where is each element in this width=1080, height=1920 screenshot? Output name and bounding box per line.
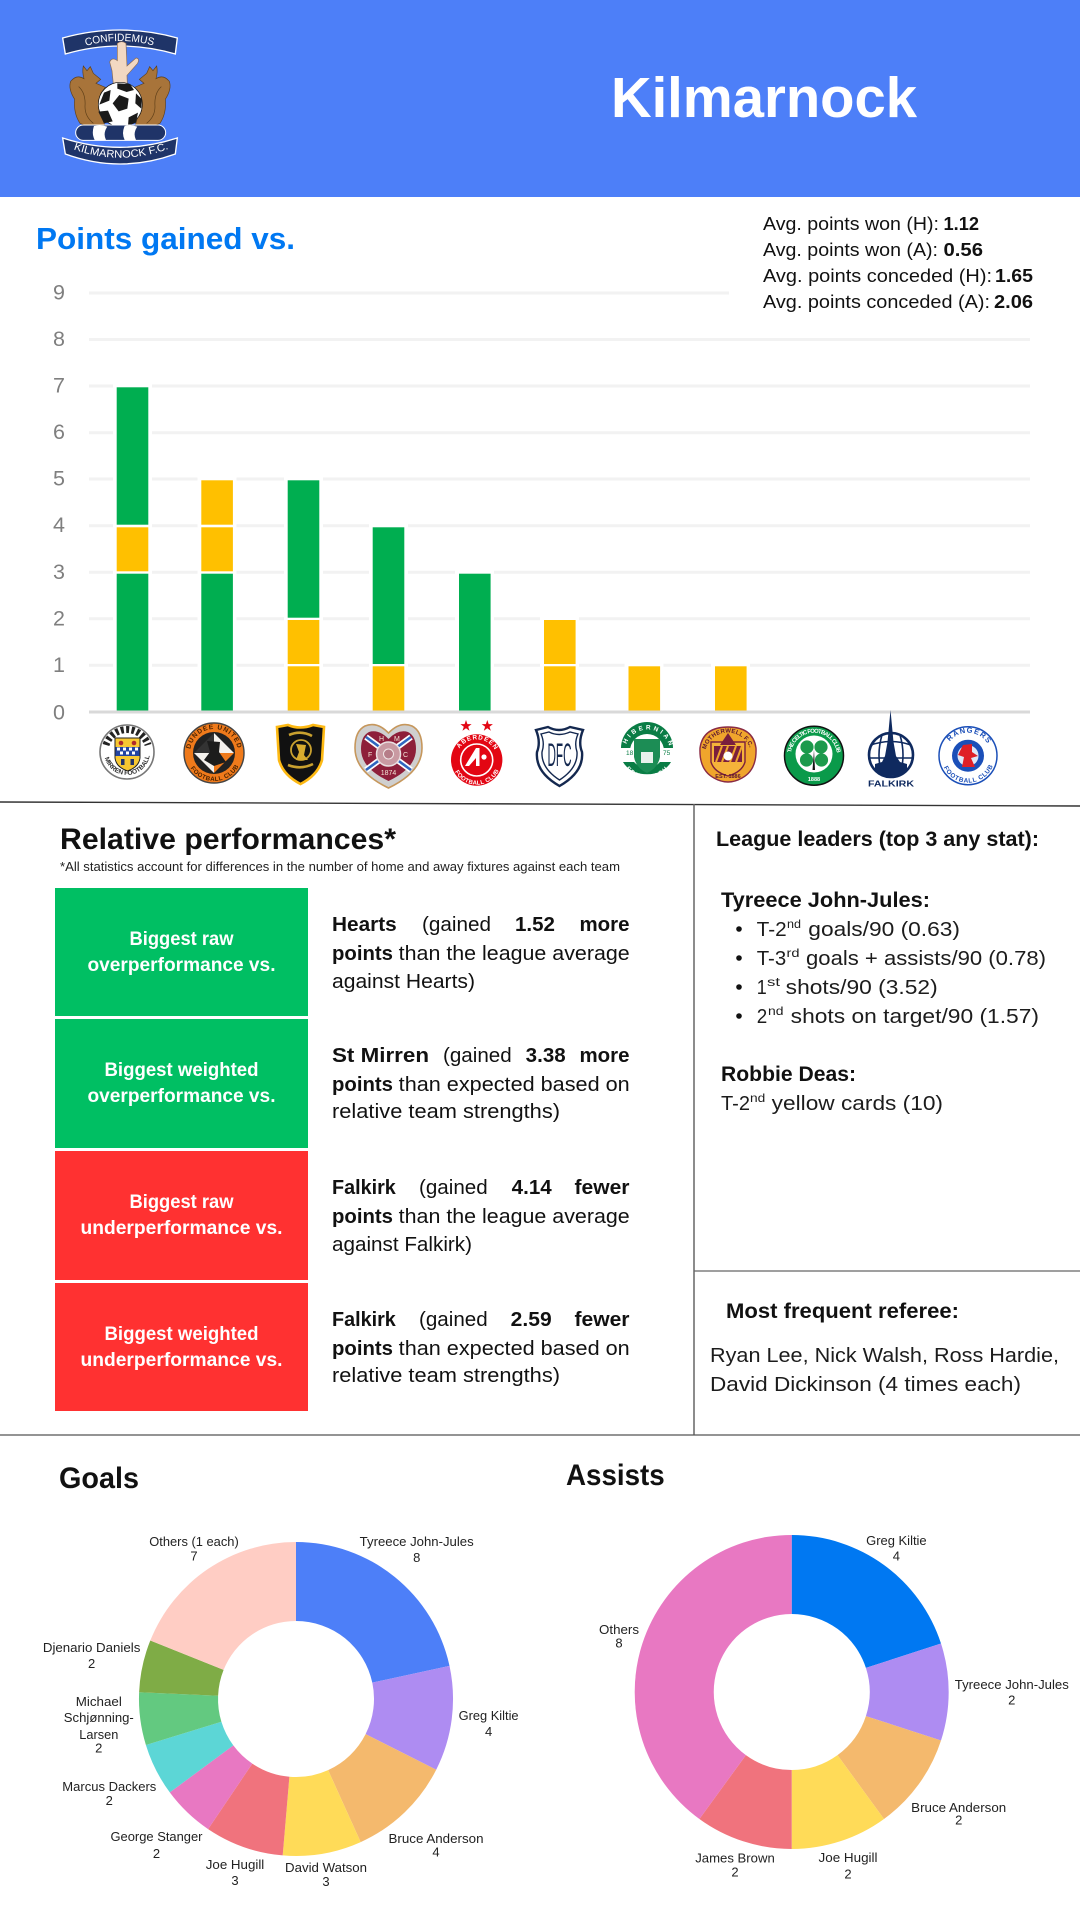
goal labels: 8: [413, 1550, 420, 1565]
goal labels: 4: [432, 1844, 440, 1860]
assist labels: 4: [893, 1548, 900, 1564]
row: raw underperformance: points: [332, 1206, 393, 1228]
goal labels: 2: [106, 1793, 113, 1808]
row: weighted underperformance: Biggest weighted: [104, 1324, 258, 1345]
row: raw overperformance: than the league average: [399, 943, 630, 965]
panel: most frequent referee: Most frequent referee:: [726, 1300, 959, 1323]
stats: average points: 2.06: [994, 291, 1033, 312]
row: weighted underperformance: [55, 1283, 630, 1411]
assist labels: Greg Kiltie: [866, 1533, 927, 1548]
icon: Rangers: [938, 726, 998, 786]
row: raw underperformance: 4.14: [512, 1177, 553, 1199]
player: Robbie Deas: Robbie Deas:: [721, 1063, 856, 1086]
goal labels: Michael: [76, 1694, 122, 1709]
panel: relative performances: [55, 823, 630, 1411]
goal labels: 2: [153, 1846, 160, 1861]
icon: Hibernian: 18: [626, 750, 634, 757]
assist labels: Joe Hugill: [818, 1850, 878, 1865]
row: weighted overperformance: (gained: [443, 1045, 512, 1067]
stats: average points: 0.56: [944, 239, 983, 260]
goal labels: Marcus Dackers: [62, 1779, 157, 1794]
player: Robbie Deas: T-2: [721, 1092, 750, 1115]
assist labels: 2: [955, 1812, 962, 1828]
row: raw underperformance: fewer: [574, 1177, 630, 1199]
icon: Rangers: RANGERS: [946, 728, 991, 743]
stats: average points: Avg. points conceded (H):: [763, 265, 992, 286]
row: weighted overperformance: points: [332, 1074, 393, 1096]
row: raw underperformance: than the league average: [399, 1206, 630, 1228]
icon: Aberdeen: [451, 720, 502, 786]
row: weighted overperformance: [55, 1019, 630, 1148]
panel: league leaders: [716, 828, 1046, 1115]
player: Tyreece John-Jules: st: [767, 975, 781, 989]
donut chart: assists: [599, 1533, 1069, 1882]
row: raw underperformance: against Falkirk): [332, 1234, 472, 1256]
icon: Hibernian: 75: [663, 750, 671, 757]
icon: Motherwell: MOTHERWELL F.C.: [702, 728, 752, 750]
icon: Hibernian: [621, 722, 673, 774]
goal labels: David Watson: [285, 1860, 367, 1875]
icon: Hearts: F: [368, 752, 372, 759]
goal labels: Others (1 each): [149, 1534, 239, 1549]
row: weighted underperformance: fewer: [574, 1309, 630, 1331]
goal labels: Joe Hugill: [206, 1857, 264, 1872]
icon: Livingston: [277, 725, 324, 784]
title: Kilmarnock: [611, 66, 917, 130]
heading: League leaders (top 3 any stat):: [716, 828, 1039, 851]
row: raw overperformance: overperformance vs.: [88, 955, 276, 976]
icon: Celtic: 1888: [808, 777, 820, 783]
row: weighted underperformance: underperformance vs.: [80, 1350, 282, 1371]
goal labels: 2: [95, 1740, 102, 1756]
icon: Hearts: 1874: [381, 770, 396, 777]
player: Robbie Deas: [721, 1063, 943, 1115]
row: raw overperformance: Hearts: [332, 914, 397, 936]
icon: Falkirk: FALKIRK: [868, 778, 915, 788]
goal labels: 3: [231, 1873, 239, 1888]
goal labels: 2: [88, 1656, 95, 1671]
icon: Dundee: DFC: [548, 737, 572, 773]
player: Tyreece John-Jules: [721, 889, 1046, 1028]
panel: most frequent referee: David Dickinson (4 times each): [710, 1373, 1021, 1396]
player: Tyreece John-Jules: T-3: [757, 947, 786, 970]
icon: Dundee United: FOOTBALL CLUB: [190, 764, 238, 781]
icon: Celtic: [784, 726, 844, 786]
heading: points gained: Points gained vs.: [36, 221, 295, 256]
player: Robbie Deas: nd: [750, 1091, 765, 1105]
stats: average points: 1.65: [995, 265, 1033, 286]
goal labels: Schjønning-: [64, 1710, 134, 1725]
row: weighted underperformance: 2.59: [511, 1309, 552, 1331]
row: weighted underperformance: (gained: [419, 1309, 488, 1331]
y axis labels: 0: [53, 700, 65, 724]
icon: Celtic: THE CELTIC FOOTBALL CLUB: [787, 728, 841, 752]
player: Tyreece John-Jules: 2: [757, 1005, 767, 1028]
icon: Hearts: M: [394, 736, 400, 743]
icon: Aberdeen: FOOTBALL CLUB: [455, 770, 498, 785]
goal labels: Tyreece John-Jules: [360, 1534, 474, 1549]
icon: Hibernian: HIBERNIAN: [622, 725, 673, 746]
icon: Hearts: H: [379, 736, 384, 743]
icon row: opponent club crests: [99, 710, 998, 789]
player: Tyreece John-Jules: 1: [757, 976, 767, 999]
y axis labels: 5: [53, 466, 65, 490]
row: raw underperformance: Biggest raw: [130, 1192, 234, 1213]
icon: Kilmarnock crest: [62, 29, 178, 165]
row: raw underperformance: underperformance vs.: [80, 1218, 282, 1239]
row: weighted underperformance: points: [332, 1338, 393, 1360]
donut chart: goals: [43, 1534, 519, 1889]
goal labels: [43, 1534, 519, 1889]
row: raw overperformance: 1.52: [515, 914, 555, 936]
player: Tyreece John-Jules: goals/90 (0.63): [808, 918, 960, 941]
icon: St Mirren: [99, 724, 155, 780]
panel: most frequent referee: Ryan Lee, Nick Walsh, Ross Hardie,: [710, 1344, 1059, 1367]
goal labels: 7: [190, 1548, 198, 1564]
row: raw underperformance: (gained: [419, 1177, 488, 1199]
y axis labels: [53, 280, 65, 724]
stats: average points: 1.12: [944, 213, 979, 234]
assist labels: 8: [615, 1636, 623, 1650]
assist labels: James Brown: [695, 1850, 775, 1866]
icon: Hibernian: EDINBURGH: [628, 766, 666, 774]
row: weighted overperformance: than expected based on: [399, 1074, 630, 1096]
bar chart: points gained vs each team: [53, 280, 1030, 724]
icon: Kilmarnock crest: CONFIDEMUS: [85, 34, 154, 46]
stats: average points: Avg. points conceded (A):: [763, 291, 990, 312]
stats: average points: Avg. points won (A):: [763, 239, 938, 260]
row: weighted underperformance: Falkirk: [332, 1309, 397, 1331]
icon: Dundee United: [183, 722, 245, 784]
row: raw overperformance: points: [332, 943, 393, 965]
player: Tyreece John-Jules: T-2: [757, 918, 787, 941]
icon: Dundee: [536, 727, 583, 786]
icon: St Mirren: MIRREN FOOTBALL: [104, 756, 150, 775]
icon: Hearts: [355, 725, 422, 788]
header banner: [0, 0, 1080, 197]
player: Tyreece John-Jules: Tyreece John-Jules:: [721, 889, 930, 912]
assist labels: 2: [844, 1866, 852, 1882]
icon: Dundee United: DUNDEE UNITED: [186, 724, 242, 749]
icon: Motherwell: EST. 1886: [715, 774, 741, 780]
stats: average points: [763, 213, 1033, 312]
icon: Falkirk: [868, 710, 915, 788]
y axis labels: 1: [53, 653, 65, 677]
row: raw overperformance: [55, 888, 630, 1016]
row: weighted underperformance: than expected based on: [399, 1338, 630, 1360]
player: Tyreece John-Jules: nd: [787, 917, 801, 931]
icon: Aberdeen: ABERDEEN: [457, 735, 498, 750]
assist labels: Bruce Anderson: [911, 1800, 1006, 1815]
assist labels: Tyreece John-Jules: [955, 1677, 1069, 1692]
heading: Relative performances*: [60, 823, 396, 856]
heading: goals: Goals: [59, 1462, 139, 1495]
stats: average points: Avg. points won (H):: [763, 213, 939, 234]
row: raw overperformance: more: [580, 914, 630, 936]
goal labels: Larsen: [79, 1727, 118, 1742]
player: Tyreece John-Jules: shots on target/90 (1.57): [791, 1005, 1039, 1028]
icon: Rangers: FOOTBALL CLUB: [944, 764, 992, 783]
row: weighted overperformance: 3.38: [526, 1045, 566, 1067]
assist labels: Others: [599, 1622, 640, 1637]
goal labels: 4: [485, 1724, 492, 1739]
row: raw overperformance: (gained: [422, 914, 491, 936]
y axis labels: 4: [53, 513, 65, 537]
y axis labels: 8: [53, 327, 65, 351]
row: raw underperformance: [55, 1151, 630, 1280]
icon: Kilmarnock crest: KILMARNOCK F.C.: [74, 142, 168, 158]
assist labels: 2: [731, 1864, 739, 1880]
bars: [113, 384, 750, 712]
goal labels: 3: [322, 1874, 330, 1889]
row: weighted overperformance: Biggest weighted: [104, 1060, 258, 1081]
row: weighted overperformance: St Mirren: [332, 1045, 429, 1067]
player: Tyreece John-Jules: rd: [786, 946, 800, 960]
y axis labels: 2: [53, 606, 65, 630]
row: raw underperformance: Falkirk: [332, 1177, 397, 1199]
goal labels: Greg Kiltie: [459, 1708, 519, 1723]
y axis labels: 9: [53, 280, 65, 304]
y axis labels: 7: [53, 374, 65, 398]
player: Tyreece John-Jules: nd: [768, 1004, 784, 1018]
row: weighted overperformance: relative team strengths): [332, 1101, 560, 1123]
footnote: *All statistics account for differences in the number of home and away fixtures against each team: [60, 860, 620, 874]
panel: most frequent referee: [710, 1300, 1059, 1396]
icon: Motherwell: [699, 726, 757, 783]
assist labels: 2: [1008, 1692, 1015, 1708]
player: Tyreece John-Jules: shots/90 (3.52): [786, 976, 938, 999]
goal labels: George Stanger: [110, 1829, 203, 1844]
assist labels: [599, 1533, 1069, 1882]
player: Tyreece John-Jules: goals + assists/90 (0.78): [806, 947, 1046, 970]
row: weighted underperformance: relative team strengths): [332, 1365, 560, 1387]
row: weighted overperformance: more: [580, 1045, 630, 1067]
row: raw overperformance: against Hearts): [332, 971, 475, 993]
y axis labels: 6: [53, 420, 65, 444]
goal labels: Djenario Daniels: [43, 1640, 141, 1655]
icon: Hearts: C: [403, 752, 408, 759]
player: Robbie Deas: yellow cards (10): [772, 1092, 943, 1115]
row: weighted overperformance: overperformance vs.: [88, 1086, 276, 1107]
y axis labels: 3: [53, 560, 65, 584]
goal labels: Bruce Anderson: [388, 1831, 484, 1846]
heading: assists: Assists: [566, 1459, 665, 1492]
row: raw overperformance: Biggest raw: [130, 929, 234, 950]
